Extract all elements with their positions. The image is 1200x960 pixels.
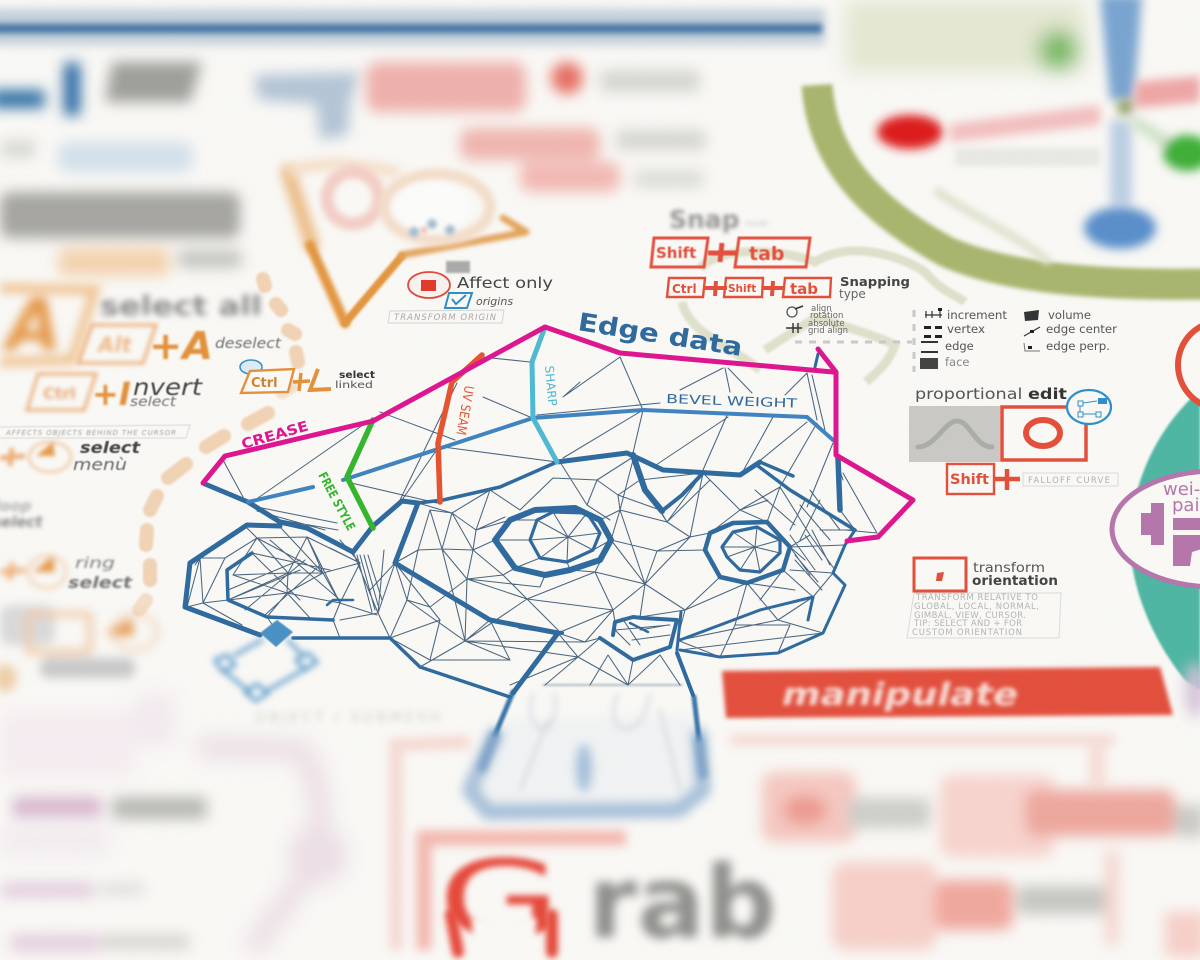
thin triangulation mesh	[187, 357, 877, 685]
key: Ctrl+I invert select	[27, 374, 203, 413]
pale green smear at top of ring	[845, 0, 1085, 72]
uv seam edge	[438, 355, 482, 502]
key: Ctrl+I invert select: nvert	[133, 375, 203, 401]
nose	[600, 617, 677, 660]
snap key: Shift + tab: Shift	[656, 244, 696, 262]
label: free style: FREE STYLE	[315, 469, 359, 533]
transform orientation panel: CUSTOM ORIENTATION	[912, 628, 1022, 638]
key: ring select: ring	[75, 554, 115, 572]
Grab panel: G	[438, 838, 561, 960]
key: Alt+A deselect: +A	[149, 324, 213, 368]
sharp edge	[532, 327, 557, 462]
handle vertices icon	[215, 620, 317, 701]
snapping elements legend: face	[945, 355, 970, 369]
cheek and jaw outline	[395, 503, 558, 693]
blurred monkey neck	[470, 685, 703, 812]
thin pale arc inside the ring	[935, 148, 1100, 262]
weight paint badge: wei-	[1163, 479, 1200, 500]
left eye	[495, 508, 611, 575]
snapping elements legend: edge perp.	[1046, 339, 1110, 353]
key: Ctrl+I invert select: select	[130, 395, 177, 410]
transform orientation panel: GLOBAL, LOCAL, NORMAL,	[914, 602, 1039, 612]
key: Alt+A deselect: deselect	[215, 336, 282, 352]
label: sharp: SHARP	[542, 365, 559, 407]
snap key: Ctrl + Shift + tab: Ctrl	[672, 282, 697, 296]
key: Ctrl+L select linked	[240, 360, 375, 393]
align rotation and grid align	[786, 304, 848, 336]
lower left blurred key	[0, 605, 157, 692]
pale red rule under the banner	[730, 734, 1115, 785]
dark blue outer hat and brow edge	[205, 484, 418, 552]
red and green axis blobs	[877, 76, 1200, 171]
key: Ctrl+L select linked: linked	[335, 380, 373, 391]
hotkey .: affect only origins: origins	[476, 295, 513, 308]
snapping elements legend	[920, 308, 1117, 369]
Grab panel	[396, 742, 776, 960]
heading: Edge data: Edge data	[576, 307, 745, 362]
transform orientation panel	[907, 558, 1061, 638]
snap key: Ctrl + Shift + tab	[667, 278, 831, 298]
snapping elements legend: edge center	[1046, 322, 1117, 336]
orange transform funnel	[288, 164, 526, 323]
key: Shift + falloff curve: Shift	[950, 472, 989, 488]
weight paint badge: pai	[1172, 495, 1199, 516]
weight paint badge	[1112, 471, 1200, 587]
transform orientation panel: TIP: SELECT AND + FOR	[913, 619, 1022, 629]
snapping type label: Snapping	[840, 274, 910, 289]
blurred pink monkey icon	[327, 172, 490, 240]
transform orientation panel: transform	[973, 561, 1045, 576]
key: ring select: select	[68, 573, 134, 592]
top centre blurred red text	[366, 62, 706, 192]
key: Ctrl+L select linked: Ctrl	[251, 376, 278, 391]
align rotation and grid align: rotation	[810, 311, 843, 321]
label: crease: CREASE	[240, 418, 310, 453]
hotkey .: affect only origins	[388, 261, 553, 323]
monkey wireframe	[185, 327, 913, 701]
free style edge	[347, 420, 373, 528]
align rotation and grid align: grid align	[808, 326, 848, 336]
blurred purple panel, lower left	[0, 695, 348, 952]
bevel weight edge	[248, 410, 833, 502]
key: Shift + falloff curve	[947, 464, 1118, 494]
dashed divider	[795, 310, 914, 372]
snap key: Ctrl + Shift + tab: tab	[790, 280, 818, 298]
snapping elements legend: vertex	[947, 322, 985, 336]
dark blue right head edge	[838, 458, 840, 510]
orange key: A select all	[0, 283, 262, 367]
key: select menu: menù	[73, 455, 127, 474]
key: Alt+A deselect	[78, 324, 282, 368]
blue axis	[1084, 0, 1156, 249]
ear outline	[185, 525, 280, 635]
blurred red and grey text blocks, lower right	[762, 772, 1200, 957]
align rotation and grid align: absolute	[808, 319, 845, 329]
snap key: Shift + tab: tab	[749, 243, 785, 265]
hotkey .: affect only origins: TRANSFORM ORIGIN	[394, 313, 497, 323]
transform orientation panel: orientation	[972, 574, 1058, 589]
transform orientation panel: GIMBAL, VIEW, CURSOR.	[914, 611, 1026, 621]
snapping type label	[839, 274, 910, 301]
blurred lower right purple corner	[1185, 662, 1200, 718]
heading: Snap: Snap	[669, 205, 740, 234]
manipulate banner: manipulate	[782, 677, 1018, 713]
right eye	[705, 522, 790, 583]
crease edge	[203, 327, 913, 541]
transform orientation panel: TRANSFORM RELATIVE TO	[915, 593, 1038, 603]
snapping elements legend: volume	[1048, 308, 1091, 322]
proportional edit panel	[909, 385, 1111, 462]
snapping type label: type	[839, 287, 866, 301]
key: Shift + falloff curve: FALLOFF CURVE	[1028, 476, 1110, 486]
key: select menu	[0, 438, 142, 474]
key: select menu: select	[80, 438, 142, 457]
hotkey .: affect only origins: Affect only	[457, 274, 553, 292]
Grab panel: rab	[588, 844, 776, 960]
right teal lens	[1130, 390, 1200, 690]
key: loop select	[0, 497, 43, 531]
top header bar	[0, 9, 825, 45]
key: Ctrl+I invert select: +I	[92, 375, 131, 413]
key: Ctrl+I invert select: Ctrl	[43, 384, 76, 403]
green ring	[817, 85, 1200, 284]
key: Alt+A deselect: Alt	[96, 333, 132, 357]
heading: Snap: mode	[745, 219, 768, 228]
label: bevel weight: BEVEL WEIGHT	[666, 391, 798, 411]
top left blurred tools	[0, 62, 360, 276]
snap key: Shift + tab	[651, 238, 810, 267]
select-mode dashed connector	[139, 279, 298, 610]
note: behind the cursor	[0, 425, 190, 438]
snap key: Ctrl + Shift + tab: Shift	[728, 283, 756, 295]
label: uv seam: UV SEAM	[452, 384, 476, 436]
red circle, right edge	[1178, 321, 1200, 409]
proportional edit panel: proportional edit	[915, 385, 1068, 403]
key: ring select	[0, 554, 134, 592]
snapping elements legend: edge	[945, 339, 974, 353]
blurred caption beneath the monkey: OBJECT / SUBMESH	[255, 710, 440, 726]
note: behind the cursor: AFFECTS OBJECTS BEHIND THE CURSOR	[5, 429, 176, 437]
key: Ctrl+L select linked: select	[339, 370, 375, 381]
align rotation and grid align: align	[811, 304, 832, 314]
orange key: A select all: select all	[100, 291, 262, 322]
dark blue brow	[557, 453, 760, 475]
pale curved arrows behind the snap panel	[682, 251, 965, 382]
orange key: A select all: A	[1, 283, 62, 367]
snapping elements legend: increment	[947, 308, 1007, 322]
manipulate banner	[722, 667, 1173, 718]
